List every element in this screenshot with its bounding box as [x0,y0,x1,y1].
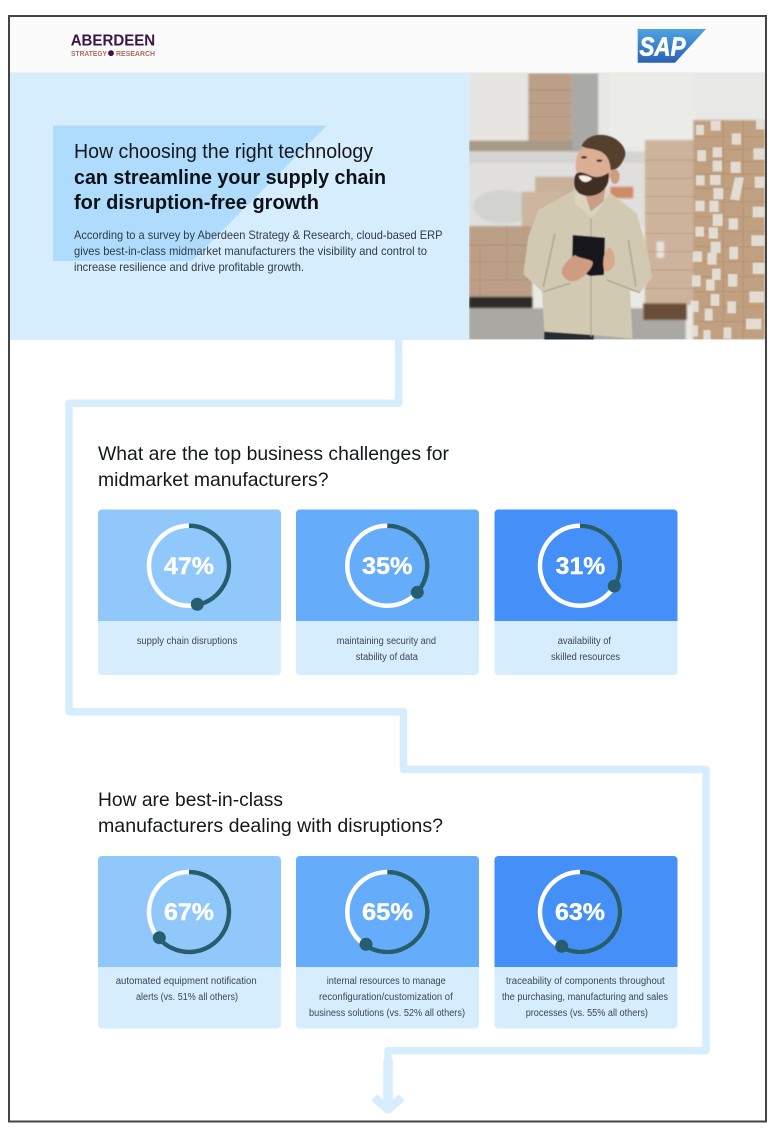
card: 35% security and stability of data: maintaining security and [337,636,436,647]
flow connector arrow [69,340,706,1110]
ring gauge 47% [149,526,229,611]
heading: dealing with disruptions [98,789,443,837]
heading: top business challenges: What are the top business challenges for [98,443,449,465]
card: 31% availability of skilled resources: availability of [558,636,611,647]
hero paragraph: According to a survey by Aberdeen Strategy & Research, cloud-based ERP [74,228,443,242]
card: 63% traceability of components [494,856,678,1028]
card: 67% automated equipment notification: automated equipment notification [116,976,257,987]
heading: dealing with disruptions: manufacturers dealing with disruptions? [98,815,443,837]
card: 63% traceability of components: the purchasing, manufacturing and sales [502,992,668,1003]
photo: smiling man with tablet in a warehouse [469,73,765,342]
ring gauge 35% [347,526,427,606]
heading: top business challenges [98,443,449,491]
card: 67% automated equipment notification: alerts (vs. 51% all others) [136,992,238,1003]
card: 47% supply chain disruptions: supply chain disruptions [137,636,237,647]
logo: Aberdeen Strategy & Research: ABERDEEN [71,32,155,50]
card: 31% availability of skilled resources: 31% [556,553,605,580]
card: 31% availability of skilled resources [494,510,678,675]
ring gauge 67% [149,872,229,952]
card: 67% automated equipment notification: 67% [164,899,214,926]
hero paragraph: increase resilience and drive profitable growth. [74,260,304,274]
logo: SAP [638,29,706,63]
hero title: for disruption-free growth [74,191,319,214]
logo: Aberdeen Strategy & Research: STRATEGY [71,49,107,58]
hero accent parallelogram [53,126,327,261]
ring gauge 65% [347,872,427,952]
card: 35% security and stability of data [296,510,479,675]
ring gauge 63% [540,872,620,953]
hero title: How choosing the right technology [74,140,374,163]
card: 65% internal resources: business solutions (vs. 52% all others) [309,1008,465,1019]
card: 65% internal resources: internal resources to manage [327,976,446,987]
heading: dealing with disruptions: How are best-in-class [98,789,283,811]
card: 35% security and stability of data: 35% [362,553,412,580]
card: 31% availability of skilled resources: skilled resources [551,652,620,663]
card: 65% internal resources: reconfiguration/customization of [319,992,453,1003]
header bar [9,17,766,74]
card: 65% internal resources [296,856,479,1028]
card: 65% internal resources: 65% [362,899,413,926]
hero panel [10,73,469,340]
card: 47% supply chain disruptions [98,510,281,675]
card: 63% traceability of components: processes (vs. 55% all others) [526,1008,648,1019]
hero title [74,140,386,214]
ring gauge 31% [540,526,621,606]
card: 47% supply chain disruptions: 47% [164,553,214,580]
logo: Aberdeen Strategy & Research [71,32,155,58]
card: 63% traceability of components: traceability of components throughout [506,976,665,987]
card: 63% traceability of components: 63% [555,899,605,926]
heading: top business challenges: midmarket manufacturers? [98,469,329,491]
card: 67% automated equipment notification [98,856,281,1028]
logo: SAP: SAP [640,32,686,62]
hero paragraph: gives best-in-class midmarket manufacturers the visibility and control to [74,244,427,258]
arrowhead [374,1098,402,1110]
hero title: can streamline your supply chain [74,166,386,189]
card: 35% security and stability of data: stability of data [356,652,418,663]
hero paragraph [74,228,443,274]
logo: Aberdeen Strategy & Research: RESEARCH [116,49,155,58]
